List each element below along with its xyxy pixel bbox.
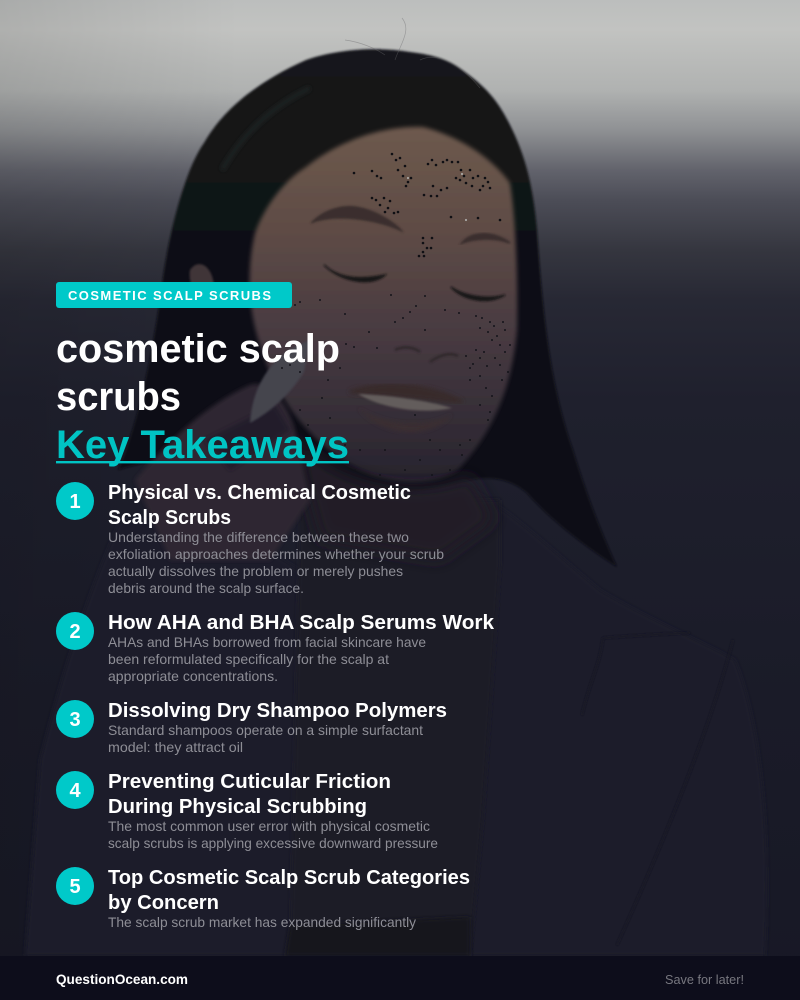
takeaway 2: How AHA and BHA Scalp Serums Work bbox=[108, 612, 495, 634]
takeaway 5: The scalp scrub market has expanded significantly bbox=[108, 914, 416, 930]
footer brand: QuestionOcean.com bbox=[56, 971, 188, 987]
flyaway hairs bbox=[345, 18, 480, 88]
hand bbox=[135, 384, 310, 560]
hair sheen bbox=[222, 88, 310, 170]
footer bar bbox=[0, 956, 800, 1000]
takeaway 1: Physical vs. Chemical Cosmetic bbox=[108, 482, 411, 504]
eye right bbox=[451, 287, 505, 300]
takeaway 2 bbox=[56, 612, 495, 684]
jacket left side bbox=[25, 520, 310, 956]
takeaway 1: debris around the scalp surface. bbox=[108, 580, 304, 596]
title accent: Key Takeaways: Key Takeaways bbox=[56, 423, 349, 467]
white glitter flecks bbox=[408, 174, 466, 220]
dark inner top bbox=[285, 917, 470, 956]
takeaway 5 bbox=[56, 867, 470, 930]
face bbox=[250, 127, 517, 482]
title: cosmetic scalp bbox=[56, 327, 340, 371]
takeaway 2: been reformulated specifically for the scalp at bbox=[108, 651, 389, 667]
takeaway 4: Preventing Cuticular Friction bbox=[108, 771, 391, 793]
takeaway 1: exfoliation approaches determines whether your scrub bbox=[108, 546, 444, 562]
neck shadow bbox=[290, 430, 495, 560]
takeaway 1 bbox=[56, 482, 444, 596]
nose shadow bbox=[395, 347, 458, 362]
eyebrow left bbox=[311, 206, 403, 232]
category tag: COSMETIC SCALP SCRUBS bbox=[68, 288, 271, 303]
takeaway 3 bbox=[56, 700, 447, 755]
takeaway 1: 1 bbox=[69, 491, 81, 513]
lower lip bbox=[358, 408, 452, 432]
takeaway 3: Standard shampoos operate on a simple surfactant bbox=[108, 722, 423, 738]
eyebrow right bbox=[462, 234, 510, 243]
category tag bbox=[56, 282, 292, 308]
takeaway 1: actually dissolves the problem or merely pushes bbox=[108, 563, 403, 579]
ear bbox=[190, 264, 214, 303]
teeth bbox=[358, 394, 452, 411]
takeaway 3: 3 bbox=[69, 709, 81, 731]
takeaway 5: by Concern bbox=[108, 892, 219, 914]
jacket right side bbox=[457, 483, 767, 956]
upper lip bbox=[350, 385, 462, 402]
takeaway 3: Dissolving Dry Shampoo Polymers bbox=[108, 700, 447, 722]
takeaway 4 bbox=[56, 771, 438, 851]
jacket pocket and seams bbox=[582, 633, 733, 945]
takeaway 5: 5 bbox=[69, 876, 81, 898]
takeaway 5: Top Cosmetic Scalp Scrub Categories bbox=[108, 867, 470, 889]
eye left bbox=[324, 265, 385, 282]
fingers shadow bbox=[205, 405, 290, 470]
takeaway 4: 4 bbox=[69, 780, 81, 802]
takeaway 3: model: they attract oil bbox=[108, 739, 243, 755]
footer save prompt: Save for later! bbox=[665, 972, 744, 987]
hair bbox=[118, 49, 617, 567]
neck and chest bbox=[290, 500, 500, 956]
takeaway 4: During Physical Scrubbing bbox=[108, 796, 367, 818]
title: scrubs bbox=[56, 375, 181, 419]
takeaway 4: scalp scrubs is applying excessive downward pressure bbox=[108, 835, 438, 851]
scrub speckles bbox=[354, 154, 500, 256]
takeaway 1: Understanding the difference between these two bbox=[108, 529, 409, 545]
title bbox=[56, 327, 349, 467]
takeaway 2: AHAs and BHAs borrowed from facial skincare have bbox=[108, 634, 426, 650]
takeaway 2: appropriate concentrations. bbox=[108, 668, 278, 684]
scrub tool bbox=[250, 340, 310, 423]
takeaway 4: The most common user error with physical cosmetic bbox=[108, 818, 430, 834]
takeaway 1: Scalp Scrubs bbox=[108, 507, 231, 529]
takeaway 2: 2 bbox=[69, 621, 81, 643]
